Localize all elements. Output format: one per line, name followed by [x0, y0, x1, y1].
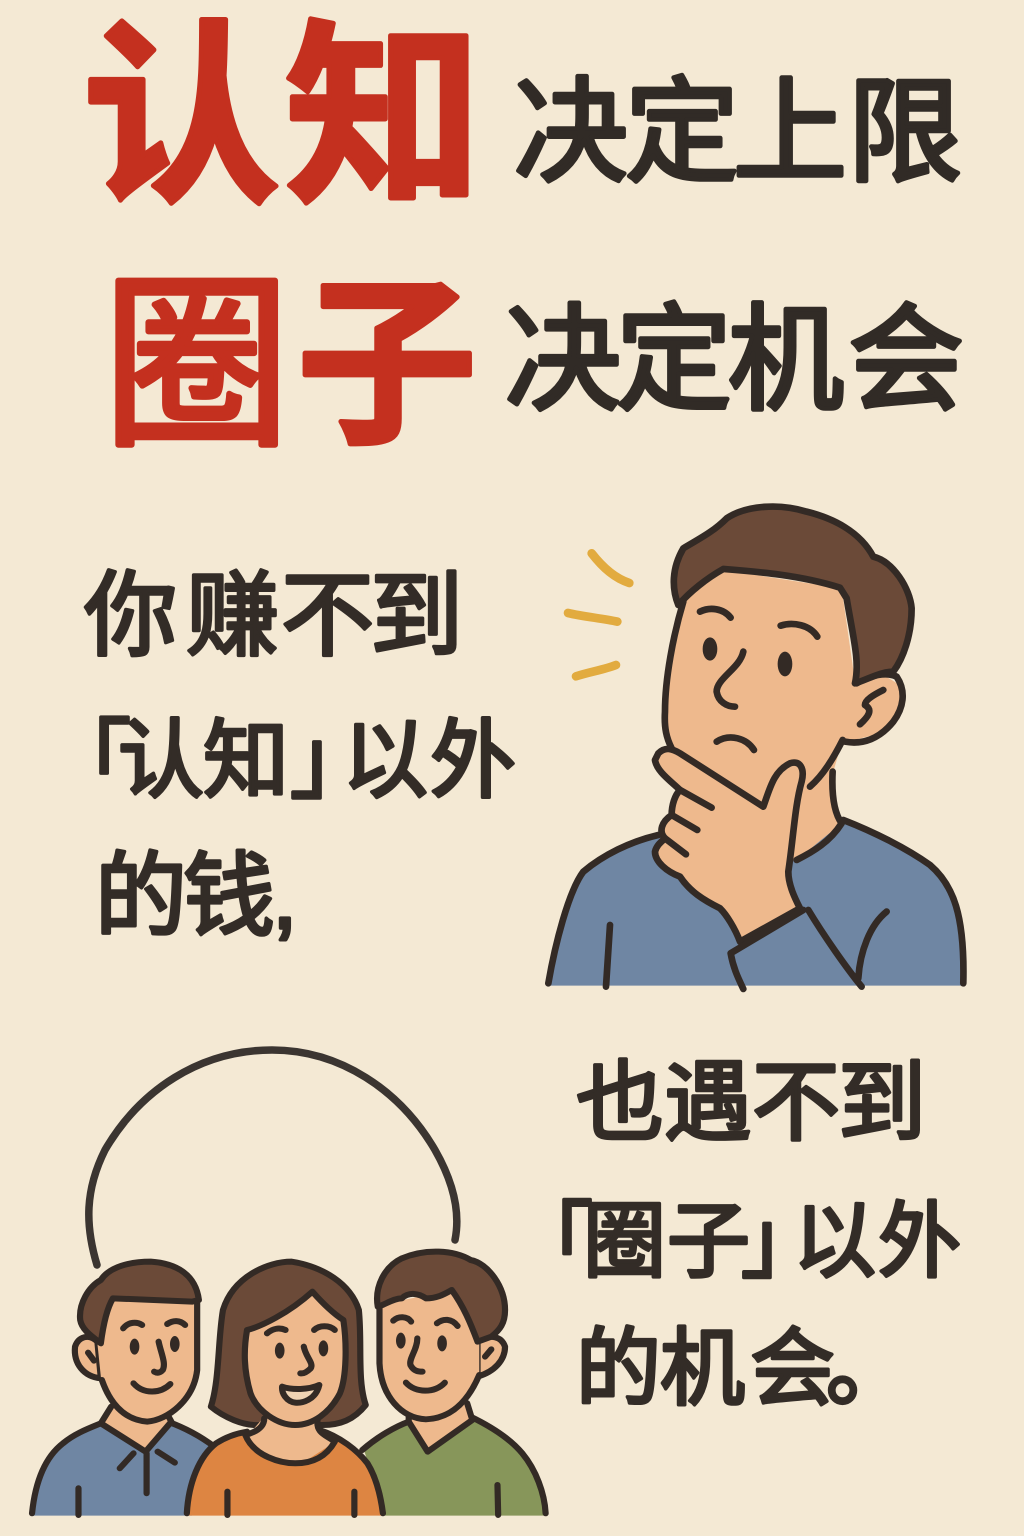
title: 圈子决定机会: [103, 261, 964, 470]
text block: circle statement: 也遇不到: [576, 1053, 926, 1152]
person right: green shirt: [362, 1252, 546, 1516]
shirt outline: [548, 820, 963, 983]
heading word: 圈子: 子: [297, 266, 477, 467]
icon: three people under arc: [30, 1050, 546, 1516]
face and neck skin: [666, 570, 902, 862]
text block: circle statement: [510, 1053, 961, 1417]
eyebrows: [700, 609, 817, 637]
neck lines: [797, 740, 843, 860]
emphasis marks: [568, 553, 629, 676]
heading text: 决定上限: 决定上限: [514, 70, 962, 197]
text block: circle statement: 的机会。: [576, 1322, 911, 1417]
text block: cognition statement: [45, 564, 516, 948]
text block: cognition statement: 你赚不到: [84, 564, 463, 668]
person left: blue shirt: [30, 1262, 214, 1516]
face outline: [665, 602, 683, 748]
eyes: [703, 637, 792, 676]
hair: [674, 507, 912, 683]
text block: cognition statement: 的钱,: [95, 846, 298, 948]
icon: thinking man: [548, 507, 963, 989]
heading word: 认知: 认知: [83, 8, 482, 228]
arc: [89, 1050, 457, 1265]
heading word: 圈子: 圈: [103, 261, 290, 470]
ear outline: [845, 674, 903, 742]
sleeve lines: [606, 910, 887, 989]
person middle: orange shirt: [185, 1262, 383, 1516]
shirt: [548, 820, 963, 986]
finger lines: [665, 790, 712, 854]
heading text: 决定机会: 决定机会: [505, 295, 964, 425]
title: 认知决定上限: [83, 8, 962, 228]
nose and mouth: [717, 652, 754, 750]
text block: cognition statement: 「认知」以外: [45, 713, 516, 809]
text block: circle statement: 「圈子」以外: [510, 1195, 961, 1288]
heading word: 圈子: [103, 261, 477, 470]
hand on chin: [655, 749, 803, 942]
